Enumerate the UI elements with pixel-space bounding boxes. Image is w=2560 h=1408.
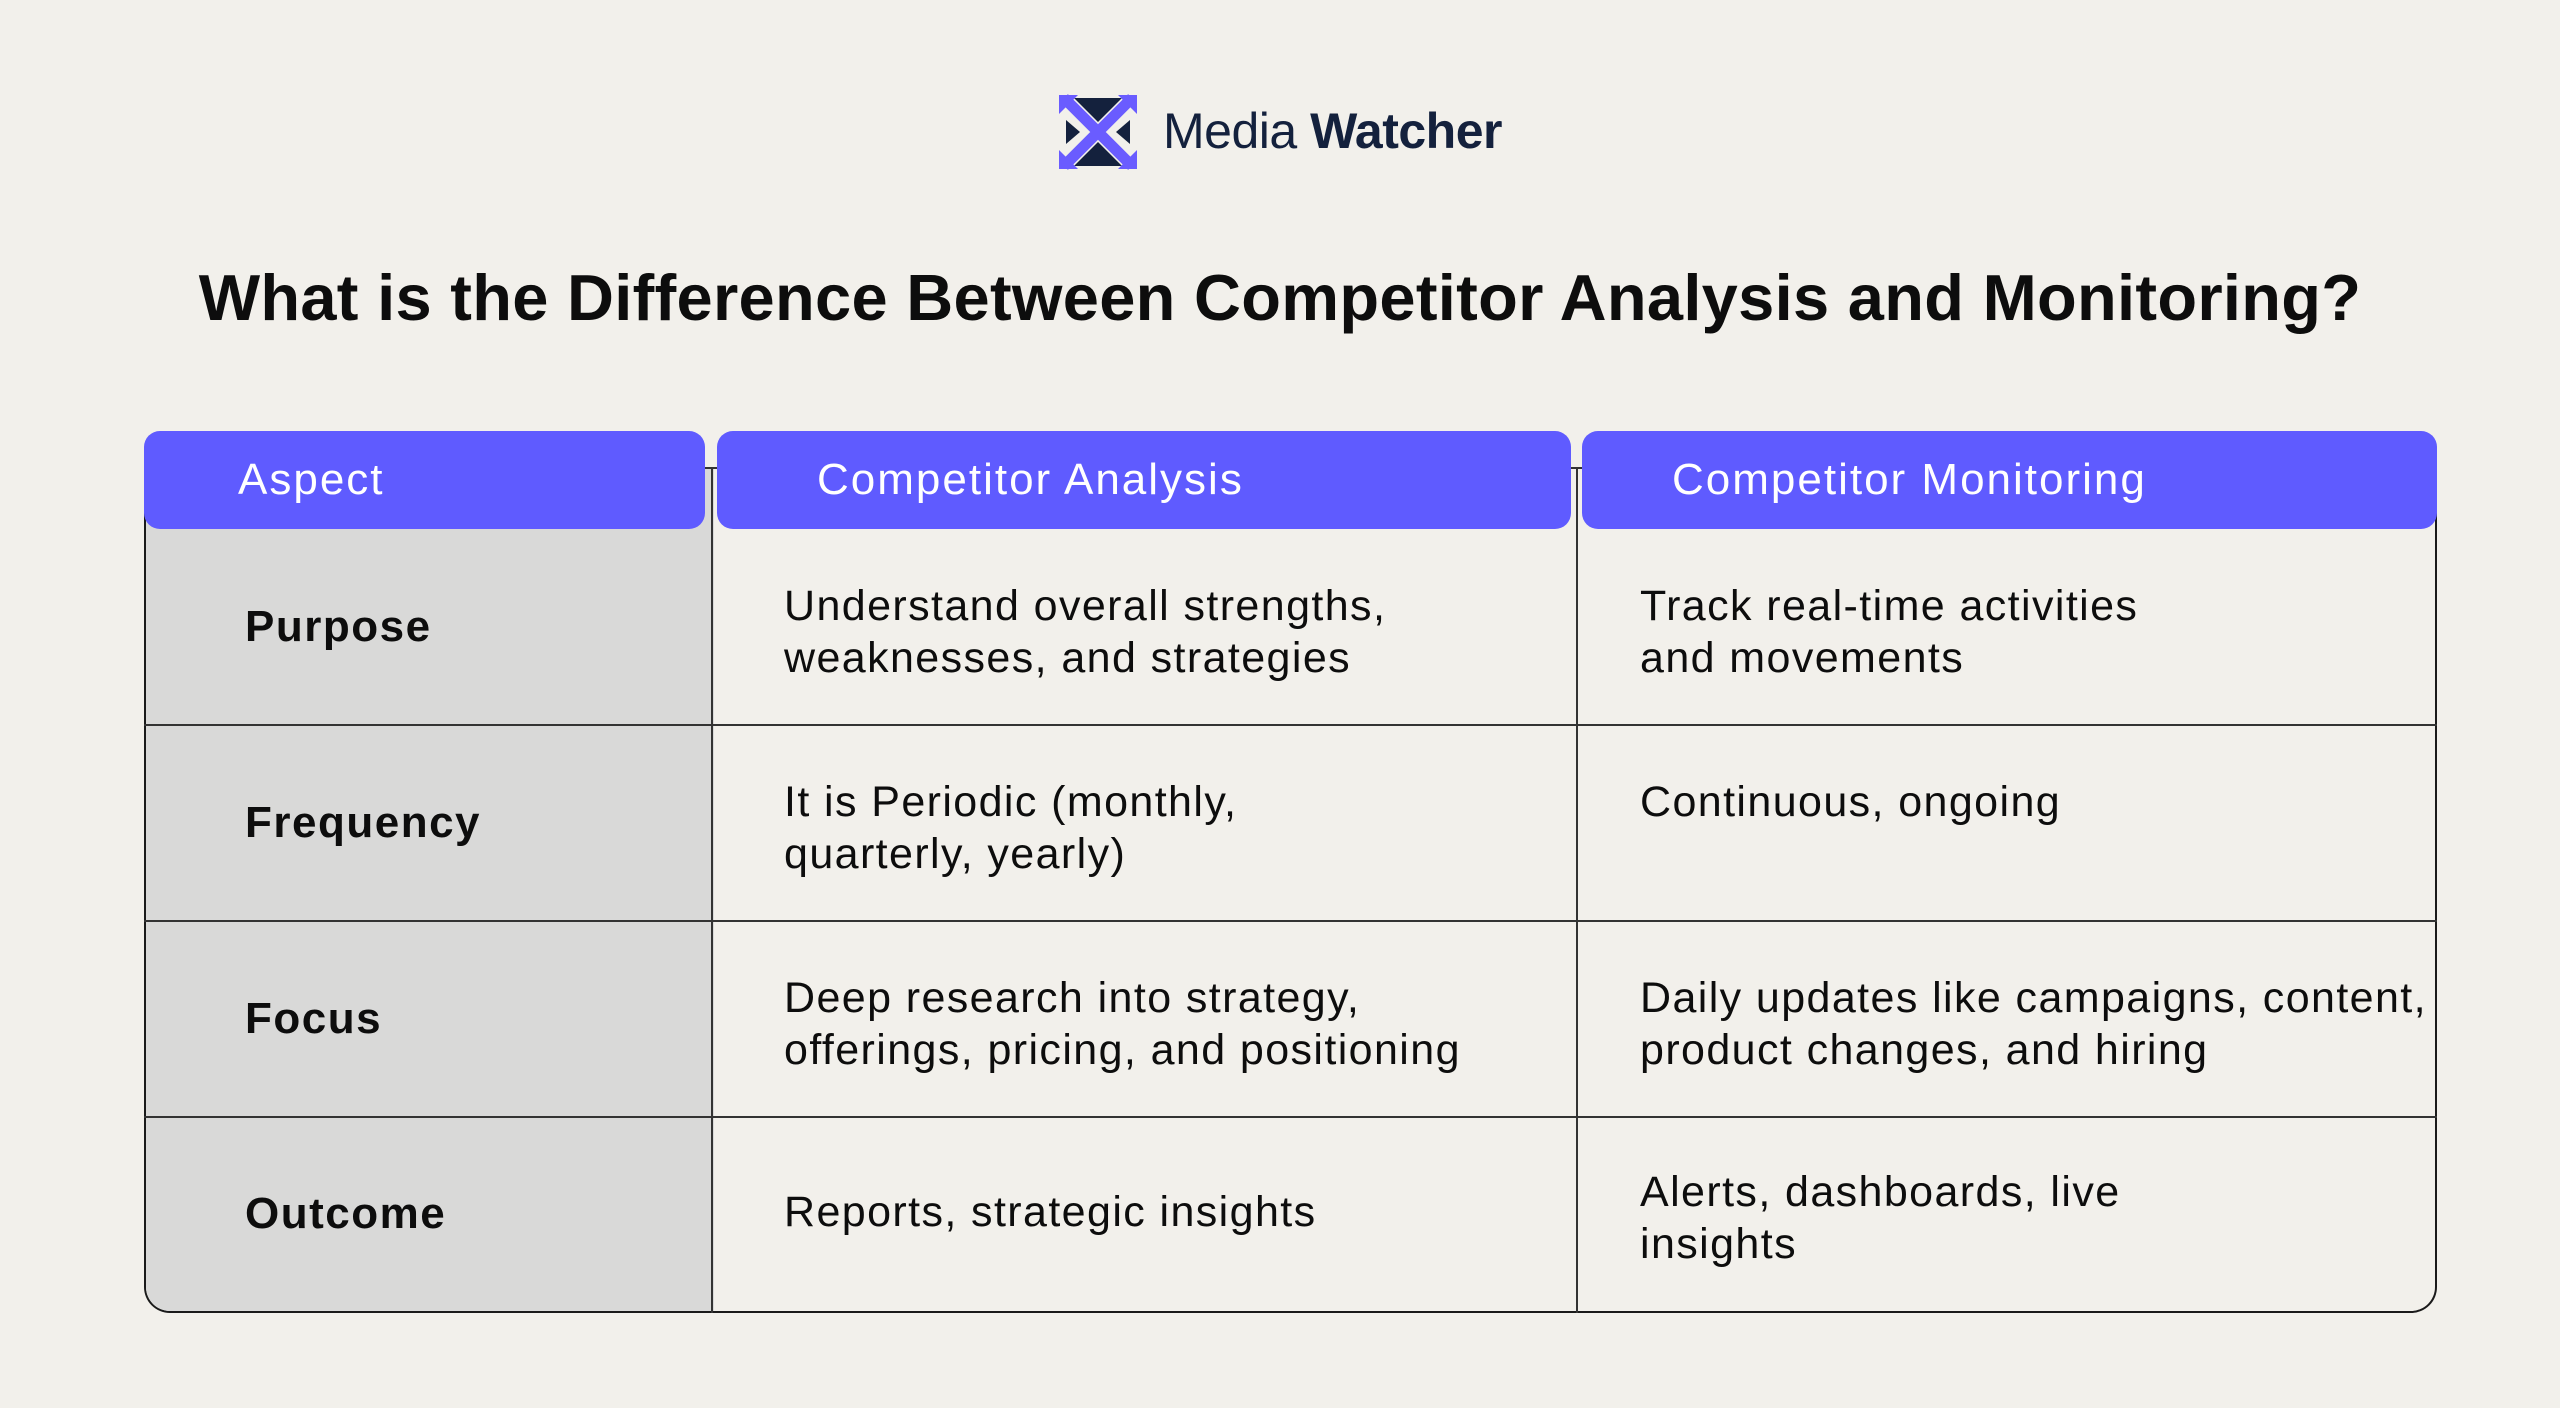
cell: outcome monitoring: Alerts, dashboards, live [1640,1168,2121,1216]
header: Aspect [144,431,705,529]
table frame [144,468,2437,1313]
cell: frequency analysis: It is Periodic (monthly, [784,778,1237,826]
header: Competitor Analysis: Competitor Analysis [817,455,1244,504]
row: Outcome: Outcome [245,1189,446,1238]
header: Competitor Monitoring [1582,431,2437,529]
header: Competitor Analysis [717,431,1571,529]
logo [1059,94,1502,170]
header: Aspect: Aspect [238,455,385,504]
row: Frequency: Frequency [245,798,481,847]
cell: focus analysis [784,974,1461,1074]
row: Focus: Focus [245,994,382,1043]
cell: purpose analysis: Understand overall strengths, [784,582,1386,630]
cell: purpose monitoring: Track real-time activities [1640,582,2138,630]
icon: logo mark [1059,94,1137,170]
cell: outcome monitoring: insights [1640,1220,1797,1268]
cell: purpose analysis [784,582,1386,682]
cell: purpose monitoring: and movements [1640,634,1964,682]
cell: frequency analysis: quarterly, yearly) [784,830,1126,878]
row: Purpose: Purpose [245,602,432,651]
brand name: Media Watcher [1163,103,1502,159]
title: What is the Difference Between Competitor Analysis and Monitoring? [199,261,2361,334]
cell: focus monitoring: Daily updates like campaigns, content, [1640,974,2427,1022]
cell: frequency monitoring: Continuous, ongoing [1640,778,2061,826]
cell: purpose monitoring [1640,582,2138,682]
cell: focus analysis: Deep research into strategy, [784,974,1360,1022]
cell: outcome analysis: Reports, strategic insights [784,1188,1317,1236]
cell: focus monitoring [1640,974,2427,1074]
cell: purpose analysis: weaknesses, and strategies [784,634,1351,682]
cell: frequency analysis [784,778,1237,878]
cell: outcome monitoring [1640,1168,2121,1268]
header: Competitor Monitoring: Competitor Monitoring [1672,455,2147,504]
cell: focus monitoring: product changes, and hiring [1640,1026,2208,1074]
cell: focus analysis: offerings, pricing, and positioning [784,1026,1461,1074]
